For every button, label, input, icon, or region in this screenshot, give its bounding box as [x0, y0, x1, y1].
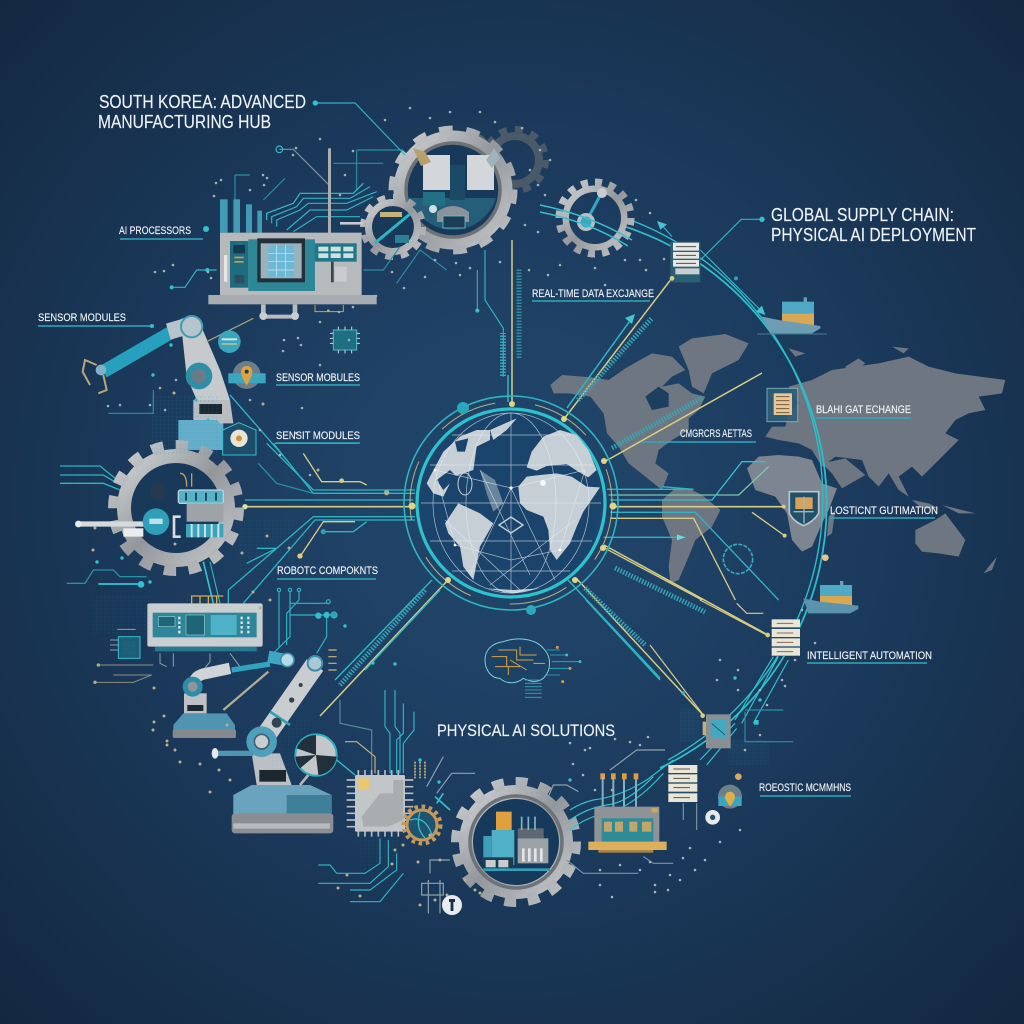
industrial controller	[588, 773, 667, 853]
shoulder core	[188, 682, 198, 692]
module right traces	[273, 588, 337, 670]
rear link	[223, 672, 268, 710]
label: robotic mechanisms: ROEOSTIC MCMMHNS	[759, 782, 851, 794]
info badge	[442, 895, 462, 915]
world map	[550, 334, 1005, 583]
status display	[315, 243, 357, 282]
network mesh	[421, 413, 601, 593]
control panel	[224, 241, 248, 288]
lower spokes	[320, 580, 448, 716]
robotic pin sensor	[705, 773, 742, 825]
label: AI processors: AI PROCESSORS	[119, 225, 191, 237]
small chip	[330, 327, 360, 353]
label: sensor modules left	[38, 312, 154, 328]
disc tool	[295, 734, 337, 785]
vertical spoke up	[511, 240, 513, 405]
label: robotic mechanisms	[759, 782, 851, 796]
top gear cluster	[363, 129, 632, 257]
gear mechanism	[75, 473, 223, 537]
left big gear	[75, 446, 238, 570]
base	[173, 713, 235, 730]
link cable	[207, 318, 253, 342]
title connector: global supply chain	[657, 217, 765, 315]
ring icon on map	[723, 544, 829, 574]
elbow joint	[181, 316, 202, 337]
pillar	[252, 753, 292, 785]
central globe	[404, 396, 618, 615]
cargo ship top	[757, 297, 827, 334]
label: intelligent automation: INTELLIGENT AUTOMATION	[807, 650, 932, 662]
base highlight	[233, 823, 330, 829]
server stack lower	[668, 765, 697, 802]
shoulder core	[192, 369, 206, 383]
label: data exchange on map: BLAHI GAT ECHANGE	[816, 404, 911, 416]
factory machine	[208, 148, 377, 320]
pillar	[193, 400, 233, 423]
gripper	[83, 360, 107, 393]
forearm light end	[168, 323, 197, 332]
pillar window	[259, 770, 286, 782]
small gold gear	[404, 806, 440, 844]
heading: physical AI solutions: PHYSICAL AI SOLUTIONS	[437, 721, 615, 740]
monitor	[257, 238, 305, 282]
wrist	[281, 653, 294, 667]
dark rear gear	[464, 129, 546, 191]
brain icon	[485, 639, 581, 697]
right side bus	[602, 462, 784, 600]
pillar window	[187, 705, 203, 711]
processor chip	[347, 770, 413, 837]
small gear left	[363, 197, 423, 257]
main top gear	[393, 130, 513, 250]
label: sensor modules left: SENSOR MODULES	[38, 312, 126, 324]
globe sphere	[421, 413, 601, 593]
label: logistics automation: LOSTICNT GUTIMATION	[830, 505, 938, 517]
rear rod	[212, 748, 253, 759]
title: South Korea advanced manufacturing hub: SOUTH KOREA: ADVANCED	[99, 92, 306, 112]
chimneys	[220, 199, 262, 233]
title: South Korea advanced manufacturing hub: MANUFACTURING HUB	[98, 112, 271, 132]
label: sensit modules: SENSIT MODULES	[276, 430, 360, 442]
hex module	[223, 423, 256, 455]
title: global supply chain: GLOBAL SUPPLY CHAIN:	[771, 205, 954, 225]
upper arm	[182, 323, 230, 400]
diagonal trace	[230, 395, 287, 460]
label: sensor mobules: SENSOR MOBULES	[276, 372, 360, 384]
globe connection lines	[320, 240, 784, 716]
machine body	[220, 233, 362, 295]
shoulder	[183, 677, 203, 697]
base	[233, 785, 332, 815]
arm band	[270, 712, 290, 725]
shoulder core	[254, 734, 269, 749]
base plate	[208, 295, 377, 304]
pillar window	[199, 404, 222, 414]
robot arm middle	[173, 653, 294, 738]
PLC control module	[147, 596, 263, 670]
small side chip	[93, 629, 153, 684]
shoulder joint	[186, 363, 212, 389]
robot arm lower	[212, 656, 337, 833]
antenna pole	[328, 148, 331, 233]
title: global supply chain: PHYSICAL AI DEPLOYMENT	[771, 225, 976, 245]
scatter data points	[93, 108, 815, 905]
forearm joint	[268, 657, 287, 660]
forearm	[103, 323, 187, 372]
struts under base	[259, 304, 343, 320]
label: robotic components: ROBOTC COMPOKNTS	[277, 565, 378, 577]
robot arm upper	[83, 316, 360, 460]
continents	[427, 418, 600, 593]
title: global supply chain	[771, 205, 976, 245]
main supply-chain arc	[620, 218, 827, 768]
forearm	[232, 664, 270, 670]
outer rings	[404, 396, 618, 610]
upper arm	[193, 668, 230, 687]
pillar	[184, 693, 207, 713]
label: cmgrcrs aettas	[642, 428, 756, 442]
fine circuit grid patches	[92, 395, 400, 880]
hex sensor	[218, 330, 241, 353]
wrist	[308, 656, 322, 671]
base skirt	[173, 729, 236, 738]
arm holes	[272, 683, 303, 728]
compute chip lower right	[680, 708, 768, 765]
location pin sensor	[228, 361, 266, 389]
lower chip circuits	[318, 690, 475, 913]
upper right spokes	[564, 278, 672, 419]
pedestal	[178, 420, 223, 450]
lower right connections	[548, 600, 793, 873]
teal band	[248, 239, 315, 291]
server stack right	[765, 619, 800, 656]
label: cmgrcrs aettas: CMGRCRS AETTAS	[680, 428, 752, 440]
arm	[265, 665, 315, 737]
server stack top	[670, 242, 700, 282]
network nodes and ring markers	[408, 401, 616, 615]
base shading	[287, 795, 332, 815]
base skirt	[232, 813, 333, 833]
cargo ship lower	[803, 581, 858, 613]
right gear	[540, 183, 632, 253]
label: real-time data exchange: REAL-TIME DATA EXCJANGE	[532, 288, 654, 300]
top circuit traces	[108, 146, 503, 413]
title connector: south korea	[313, 100, 405, 155]
bottom big gear	[457, 783, 575, 901]
shield device	[782, 492, 819, 538]
shoulder	[246, 726, 277, 757]
document device	[767, 388, 798, 422]
mini factory	[483, 812, 550, 871]
title: South Korea advanced manufacturing hub	[98, 92, 306, 132]
left circuit bus into globe	[60, 443, 415, 603]
